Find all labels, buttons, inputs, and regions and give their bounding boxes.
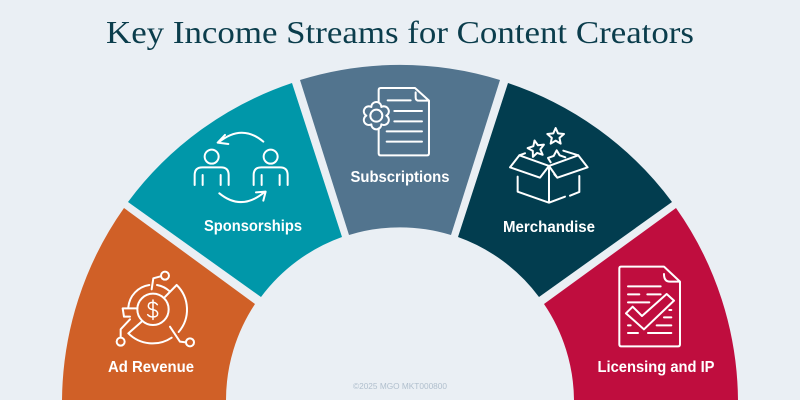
- title: Key Income Streams for Content Creators: [106, 14, 694, 50]
- label: licensing and ip: Licensing and IP: [598, 359, 715, 376]
- icon: dollar target with nodes: [117, 272, 194, 346]
- label: sponsorships: Sponsorships: [204, 218, 302, 235]
- icon: open box with stars: [510, 128, 588, 203]
- panel: licensing and ip: [544, 208, 738, 400]
- label: ad revenue: Ad Revenue: [108, 359, 194, 376]
- segment: merchandise: [458, 83, 672, 297]
- segment: ad revenue: [62, 208, 255, 400]
- segment: subscriptions: [300, 65, 500, 235]
- label: subscriptions: Subscriptions: [350, 169, 450, 186]
- segment: sponsorships: [128, 83, 342, 297]
- icon: document with gear: [364, 88, 429, 155]
- label: merchandise: Merchandise: [503, 219, 595, 236]
- icon: two people exchanging: [195, 133, 288, 202]
- panel: merchandise: [458, 83, 672, 297]
- copyright note: ©2025 MGO MKT000800: [353, 381, 447, 391]
- segment: licensing and ip: [544, 208, 738, 400]
- panel: sponsorships: [128, 83, 342, 297]
- panel: ad revenue: [62, 208, 255, 400]
- panel: subscriptions: [300, 65, 500, 235]
- icon: document with check mark: [619, 267, 680, 346]
